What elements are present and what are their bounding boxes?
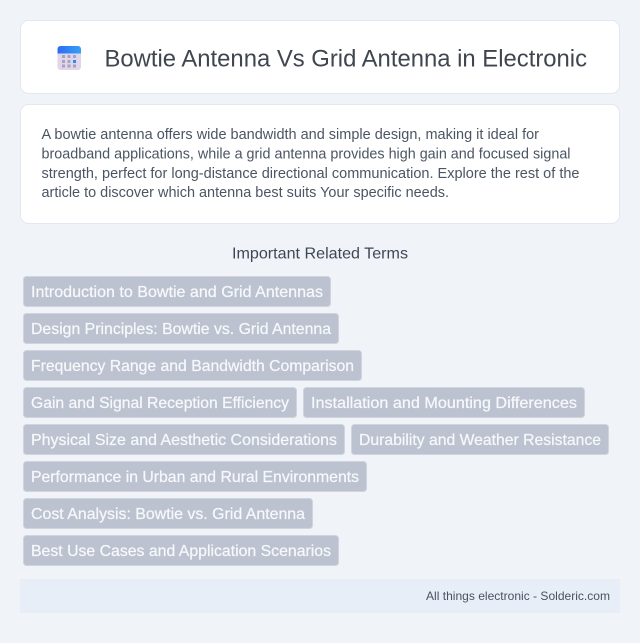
footer <box>20 579 620 613</box>
text block: intro <box>42 127 580 201</box>
chip: introduction <box>24 276 330 306</box>
heading: related terms: Important Related Terms <box>232 246 408 262</box>
chip: installation: Installation and Mounting Differences <box>311 395 577 412</box>
icon: calendar <box>58 46 81 70</box>
chip: use cases: Best Use Cases and Application Scenarios <box>31 543 331 560</box>
chip: design principles <box>24 314 338 344</box>
chip: design principles: Design Principles: Bowtie vs. Grid Antenna <box>31 321 331 338</box>
title: Bowtie Antenna Vs Grid Antenna in Electronic <box>104 46 587 72</box>
chip: use cases <box>24 536 338 566</box>
chip: frequency range <box>24 350 362 380</box>
text block: intro: A bowtie antenna offers wide bandwidth and simple design, making it ideal for <box>42 127 539 143</box>
chip: physical size <box>24 424 344 454</box>
chip: durability: Durability and Weather Resistance <box>359 432 601 449</box>
text block: intro: strength, perfect for long-distance directional communication. Explore the rest of the <box>42 166 580 182</box>
footer: All things electronic - Solderic.com <box>426 589 610 603</box>
chip: introduction: Introduction to Bowtie and Grid Antennas <box>31 284 323 301</box>
chip: durability <box>352 424 608 454</box>
chip: cost: Cost Analysis: Bowtie vs. Grid Antenna <box>31 506 305 523</box>
panel: title header <box>20 20 620 94</box>
chip: installation <box>304 388 584 418</box>
chip: gain: Gain and Signal Reception Efficiency <box>31 395 289 412</box>
chip: performance <box>24 462 366 492</box>
chip: frequency range: Frequency Range and Bandwidth Comparison <box>31 358 354 375</box>
chip: performance: Performance in Urban and Rural Environments <box>31 469 359 486</box>
text block: intro: broadband applications, while a grid antenna provides high gain and focused signal <box>42 146 570 162</box>
chip: physical size: Physical Size and Aesthetic Considerations <box>31 432 337 449</box>
panel: intro paragraph <box>20 104 620 224</box>
term chips <box>24 276 608 566</box>
chip: cost <box>24 498 312 528</box>
chip: gain <box>24 388 296 418</box>
text block: intro: article to discover which antenna best suits Your specific needs. <box>42 185 449 201</box>
